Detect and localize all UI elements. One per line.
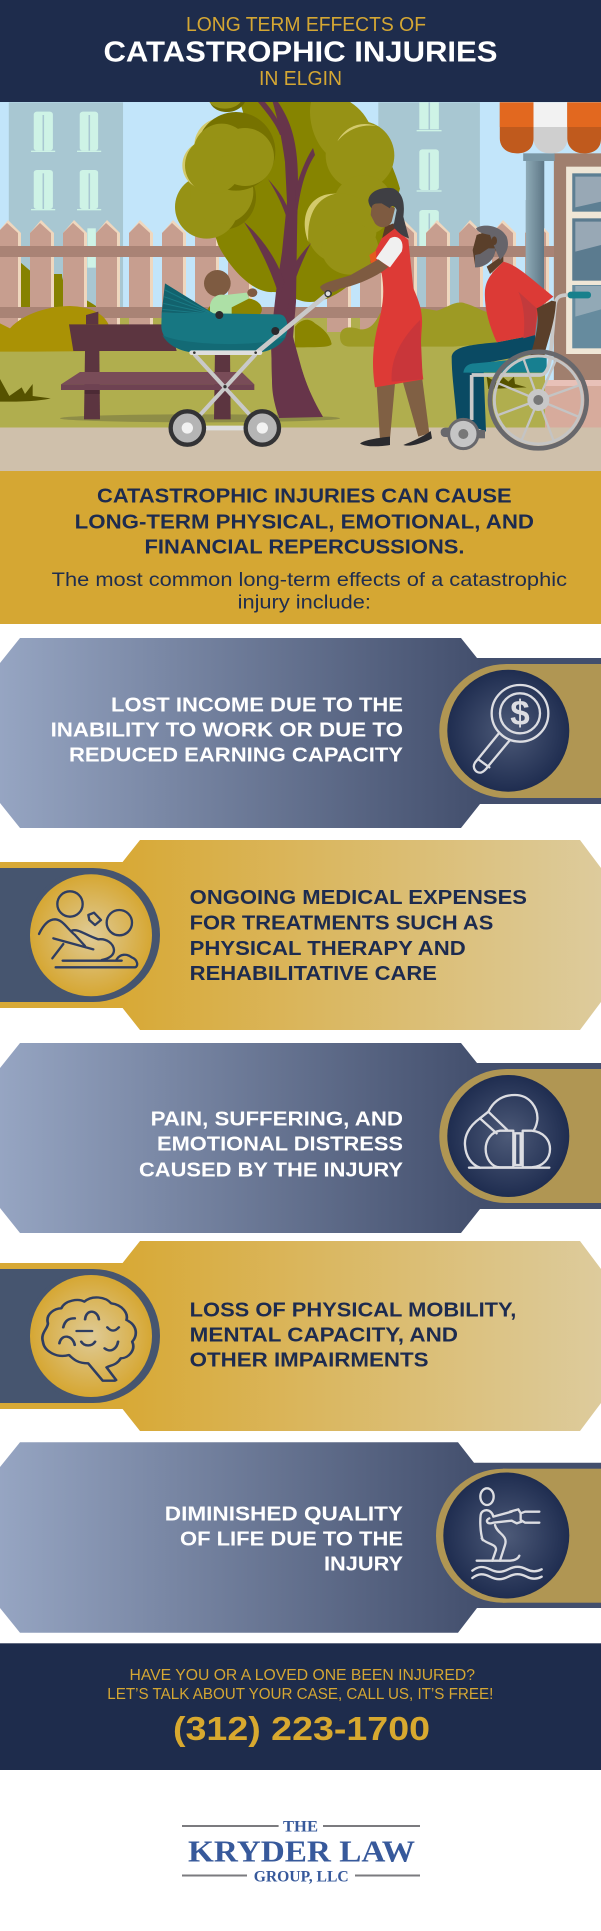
intro text: injury include: (238, 592, 371, 614)
text: loss of mobility (190, 1300, 516, 1372)
bush at tree base (295, 320, 332, 347)
right storefront (523, 153, 601, 428)
logo: The Kryder Law Group, LLC: THE (283, 1819, 318, 1836)
intro heading (75, 485, 534, 558)
right shrub (340, 303, 527, 389)
panel: pain and suffering (0, 1043, 601, 1233)
icon: physical therapy (39, 891, 137, 967)
text: pain and suffering: EMOTIONAL DISTRESS (157, 1134, 403, 1156)
call to action text: LET’S TALK ABOUT YOUR CASE, CALL US, IT’S FREE! (107, 1686, 493, 1703)
text: quality of life: INJURY (324, 1554, 403, 1576)
logo: The Kryder Law Group, LLC: KRYDER LAW (188, 1834, 415, 1869)
awning (500, 102, 601, 153)
woman (360, 188, 432, 446)
text: loss of mobility: MENTAL CAPACITY, AND (190, 1325, 458, 1347)
text: medical expenses: ONGOING MEDICAL EXPENSES (190, 887, 527, 909)
phone number: (312) 223-1700 (173, 1710, 430, 1747)
text: pain and suffering: PAIN, SUFFERING, AND (151, 1108, 403, 1130)
icon: magnifier with dollar: $ (510, 694, 530, 733)
panel: lost income (0, 638, 601, 828)
title line 1: LONG TERM EFFECTS OF (186, 14, 426, 36)
sky (0, 102, 601, 432)
text: lost income: REDUCED EARNING CAPACITY (69, 745, 403, 767)
text: medical expenses: REHABILITATIVE CARE (190, 963, 437, 985)
icon: pills (465, 1095, 550, 1168)
tree trunk base (271, 337, 323, 418)
intro heading: LONG-TERM PHYSICAL, EMOTIONAL, AND (75, 511, 534, 534)
left shrub (0, 306, 108, 352)
intro heading: FINANCIAL REPERCUSSIONS. (144, 535, 464, 558)
text: pain and suffering (139, 1108, 403, 1182)
text: medical expenses (190, 887, 527, 985)
text: pain and suffering: CAUSED BY THE INJURY (139, 1160, 403, 1182)
intro heading: CATASTROPHIC INJURIES CAN CAUSE (97, 485, 512, 508)
tree (175, 102, 400, 302)
title line 2: CATASTROPHIC INJURIES (104, 37, 498, 69)
bench (0, 312, 340, 422)
title line 3: IN ELGIN (259, 68, 342, 90)
text: quality of life: OF LIFE DUE TO THE (180, 1529, 403, 1551)
panel: medical expenses (0, 840, 601, 1030)
intro text (52, 569, 567, 614)
woman's arm (320, 259, 388, 297)
logo: The Kryder Law Group, LLC: GROUP, LLC (254, 1869, 349, 1886)
panel: loss of mobility (0, 1241, 601, 1431)
back shrub (20, 262, 96, 325)
lawn (0, 318, 545, 428)
text: quality of life: DIMINISHED QUALITY (165, 1504, 403, 1526)
header band (0, 0, 601, 102)
text: medical expenses: PHYSICAL THERAPY AND (190, 938, 466, 960)
text: lost income (51, 695, 403, 767)
logo: The Kryder Law Group, LLC (182, 1819, 420, 1886)
intro text: The most common long-term effects of a catastrophic (52, 569, 567, 591)
background buildings (9, 102, 480, 342)
text: quality of life (165, 1504, 403, 1576)
text: medical expenses: FOR TREATMENTS SUCH AS (190, 912, 493, 934)
text: loss of mobility: LOSS OF PHYSICAL MOBILITY, (190, 1300, 516, 1322)
intro panel (0, 471, 601, 624)
stroller (161, 283, 331, 445)
tree trunk (244, 102, 323, 418)
ground path (0, 428, 601, 472)
call to action text: HAVE YOU OR A LOVED ONE BEEN INJURED? (130, 1667, 475, 1684)
man in wheelchair (441, 226, 591, 449)
panel: quality of life (0, 1442, 601, 1633)
icon: brain (42, 1297, 136, 1381)
fence (0, 200, 554, 340)
text: loss of mobility: OTHER IMPAIRMENTS (190, 1350, 428, 1372)
text: lost income: LOST INCOME DUE TO THE (111, 695, 403, 717)
call to action text (107, 1667, 493, 1703)
text: lost income: INABILITY TO WORK OR DUE TO (51, 720, 403, 742)
icon: magnifier with dollar (474, 685, 548, 773)
call to action band (0, 1643, 601, 1770)
illustration: park scene (0, 102, 601, 472)
baby (204, 270, 262, 314)
icon: water skier (472, 1488, 542, 1579)
